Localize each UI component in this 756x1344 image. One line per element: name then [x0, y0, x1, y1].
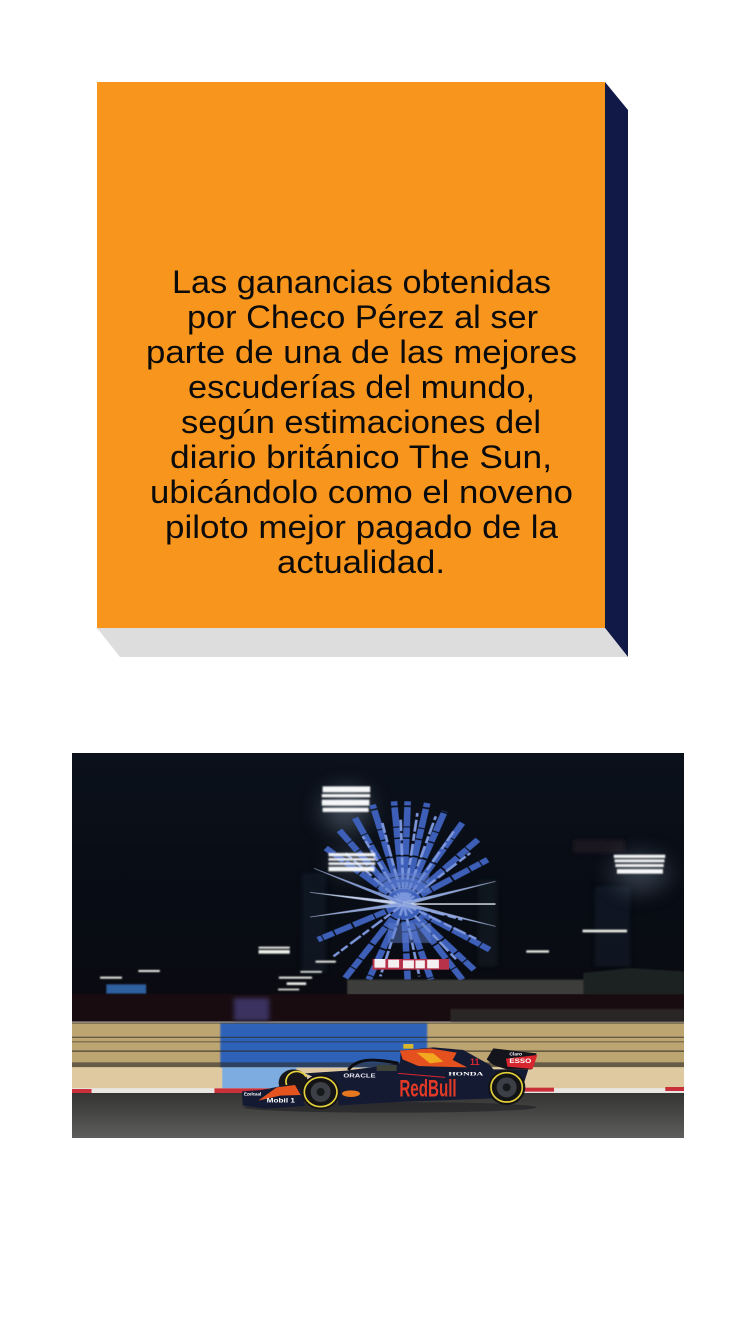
text block: earnings description: por Checo Pérez al ser: [187, 299, 538, 335]
rear-left wheel: [279, 1069, 308, 1096]
kerb: [72, 1088, 684, 1094]
ferris wheel spokes: [318, 801, 490, 980]
number 11: 11: [470, 1057, 479, 1067]
barrier stripes: [72, 1022, 684, 1067]
text: ORACLE: ORACLE: [343, 1074, 376, 1080]
text block: earnings description: piloto mejor pagado de la: [165, 509, 558, 545]
lamp glows: [323, 786, 667, 893]
blue advertising barrier: [220, 1023, 427, 1068]
halo: [348, 1060, 398, 1070]
box bottom: grey: [97, 628, 628, 657]
night sky: [72, 753, 684, 996]
text block: earnings description: según estimaciones del: [181, 404, 541, 440]
photo: Red Bull F1 car at night with Ferris wheel: [72, 753, 684, 1138]
engine cover bull: [400, 1048, 467, 1067]
ferris wheel hub blocks: [378, 873, 431, 943]
panel: 3D orange text box: [97, 82, 628, 657]
rear wing: [487, 1048, 537, 1069]
driver helmet: [377, 1044, 413, 1071]
illuminated sign: [373, 959, 449, 970]
stadium lamp: middle: [328, 853, 375, 871]
sand run-off: [72, 1068, 684, 1088]
red line: [398, 1073, 445, 1077]
text: HONDA: HONDA: [448, 1072, 485, 1078]
text block: earnings description: Las ganancias obtenidas: [172, 264, 551, 300]
distant lights: [100, 930, 627, 990]
box side: navy: [605, 82, 628, 657]
text: Tezos: Ezelcaal: [244, 1091, 261, 1096]
ferris wheel bright horizontal spokes: [310, 868, 495, 926]
ferris wheel secondary spokes: [334, 813, 478, 976]
car: Red Bull RB16B: [242, 1044, 537, 1113]
car shadow: [243, 1102, 537, 1113]
tan barrier: [72, 1022, 684, 1068]
text block: earnings description: parte de una de las mejores: [146, 334, 577, 370]
track: [72, 1093, 684, 1138]
rear wing ESSO panel: [506, 1055, 537, 1069]
nose bull livery: [258, 1085, 301, 1101]
dark wall: [72, 994, 684, 1022]
stadium lamp: top: [322, 786, 370, 812]
blurred towers: [302, 840, 630, 973]
text block: earnings description: diario británico The Sun,: [170, 439, 552, 475]
text block: earnings description: ubicándolo como el noveno: [150, 474, 573, 510]
text block: earnings description: escuderías del mundo,: [188, 369, 535, 405]
front wing: [242, 1085, 305, 1109]
text: ESSO: ESSO: [509, 1059, 532, 1065]
text: Claro: Claro: [509, 1051, 522, 1057]
text block: earnings description: actualidad.: [277, 544, 445, 580]
text block: earnings description: [146, 264, 577, 580]
rear wheel: [488, 1070, 525, 1105]
sidepod orange mark: [342, 1090, 360, 1097]
text: Mobil 1: Mobil 1: [267, 1098, 295, 1105]
box front: orange: [97, 82, 605, 628]
car body: [305, 1047, 528, 1105]
text: Red Bull: RedBull: [399, 1076, 457, 1103]
front wheel: [301, 1075, 340, 1109]
stadium lamp: right: [614, 855, 665, 874]
blue distant sign: [106, 984, 146, 994]
grey grandstand: [347, 968, 684, 995]
